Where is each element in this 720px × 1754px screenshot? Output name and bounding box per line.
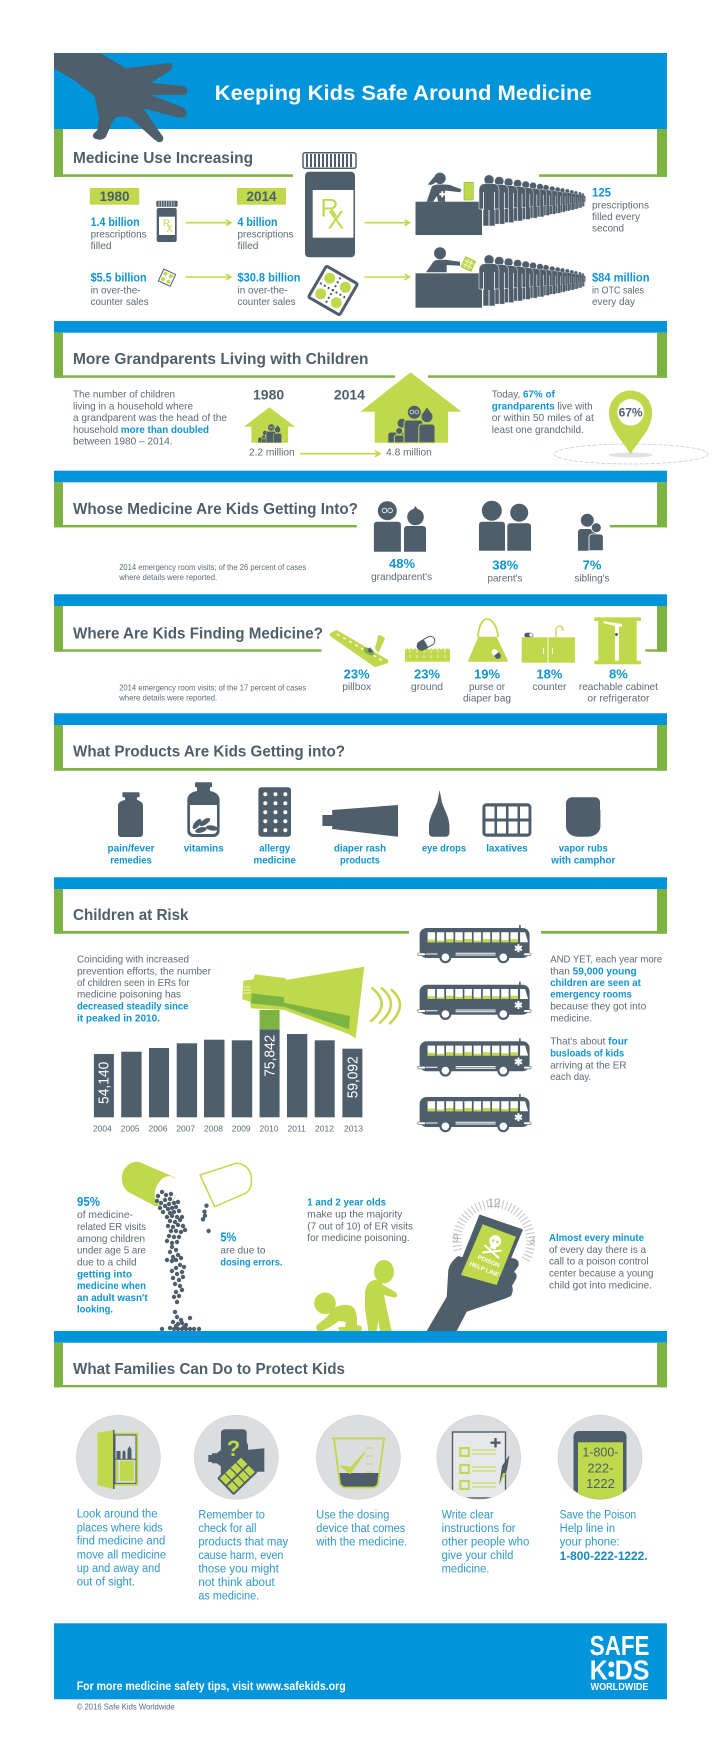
tip 1: medicine cabinet: move all medicine — [77, 1549, 166, 1561]
text: 95 percent getting into medicine: among children — [77, 1233, 145, 1245]
tip 2: check all products: as medicine. — [198, 1590, 259, 1602]
text: almost every minute: of every day there is a — [549, 1244, 646, 1256]
stat: ground 23 percent: ground — [411, 681, 443, 693]
text: and yet 59,000 children: medicine. — [550, 1012, 592, 1024]
bar chart: ER visits 2004 to 2013 — [93, 1010, 363, 1133]
stat: 125 prescriptions per second: prescriptions — [592, 199, 649, 211]
stat: sibling's 7 percent: sibling's — [574, 572, 610, 584]
stat: 84 million OTC sales: every day — [592, 296, 636, 308]
icon: megaphone — [242, 967, 400, 1038]
2014 prescriptions stat: filled — [238, 240, 259, 252]
tip 5: save poison help line: 222- — [587, 1460, 613, 1475]
text: 95 percent getting into medicine: medicine when — [77, 1280, 146, 1292]
stat: pillbox 23 percent — [330, 630, 388, 693]
arrow — [364, 220, 410, 226]
tip 4: clear instructions: Write clear — [442, 1509, 494, 1521]
text: grandparent household paragraph: a grandparent was the head of the — [73, 412, 227, 424]
icon: map pin 67 percent: 67% — [619, 406, 643, 420]
text: 95 percent getting into medicine: getting into — [77, 1268, 132, 1280]
text: 95 percent getting into medicine: 95% — [77, 1194, 100, 1209]
text: and yet 59,000 children: than 59,000 young — [550, 965, 637, 977]
stat: counter 18 percent: counter — [532, 681, 567, 693]
bar chart: ER visits 2004 to 2013: 54,140 — [97, 1062, 113, 1104]
text: 67 percent of grandparents: or within 50 miles of at — [492, 412, 594, 424]
text: grandparent household paragraph — [73, 388, 227, 448]
product: allergy medicine: medicine — [254, 854, 296, 866]
text: and yet 59,000 children: emergency rooms — [550, 989, 632, 1001]
tip 4: clear instructions: instructions for — [442, 1523, 516, 1535]
logo: safe kids worldwide — [590, 1630, 649, 1693]
text: ER visits trend — [77, 953, 211, 1024]
stat: 125 prescriptions per second: filled every — [592, 211, 641, 223]
panel frame: whose medicine — [54, 471, 667, 527]
product: pain fever remedies: pain/fever — [108, 843, 154, 855]
tip 4: clear instructions — [437, 1415, 529, 1575]
tip 5: save poison help line — [558, 1415, 648, 1563]
bar chart: ER visits 2004 to 2013: 2011 — [288, 1123, 306, 1133]
text: almost every minute: call to a poison control — [549, 1256, 649, 1268]
text: four busloads of kids: each day. — [550, 1071, 591, 1083]
2014 over-the-counter stat: in over-the- — [238, 284, 288, 296]
text: 67 percent of grandparents: grandparents live with — [492, 400, 593, 412]
text: 67 percent of grandparents — [492, 388, 594, 436]
icon: small prescription bottle: X — [166, 224, 173, 235]
stat: 84 million OTC sales — [592, 271, 650, 308]
panel frame: what products — [54, 713, 667, 771]
stat: parent's 38 percent: 38% — [492, 557, 519, 572]
heading: whose medicine: Whose Medicine Are Kids Getting Into? — [73, 501, 358, 518]
product: allergy medicine — [254, 787, 296, 866]
icon: hand holding poison help line phone: 3 — [529, 1235, 535, 1247]
icon: reaching hand — [54, 53, 187, 142]
stat: 125 prescriptions per second — [592, 186, 649, 235]
tip 5: save poison help line: Help line in — [560, 1523, 615, 1535]
product: pain fever remedies — [108, 792, 154, 866]
stat: counter 18 percent: 18% — [536, 666, 563, 681]
1980 over-the-counter stat — [91, 271, 149, 308]
product: eye drops — [422, 790, 466, 855]
tip 3: dosing device — [315, 1415, 407, 1548]
tip 5: save poison help line: 1-800-222-1222. — [560, 1549, 648, 1563]
stat: 84 million OTC sales: $84 million — [592, 271, 650, 285]
bar chart: ER visits 2004 to 2013: 2008 — [204, 1123, 223, 1133]
text: 95 percent getting into medicine: of medicine- — [77, 1209, 133, 1221]
text: grandparent household paragraph: The number of children — [73, 388, 175, 400]
1980 prescriptions stat — [90, 188, 147, 252]
text: 95 percent getting into medicine: under age 5 are — [77, 1245, 146, 1257]
tip 5: save poison help line: 1-800- — [582, 1445, 618, 1460]
2014 house with family: 4.8 million — [386, 447, 432, 459]
1980 house with family: 2.2 million — [249, 447, 295, 459]
stat: counter 18 percent — [522, 626, 575, 693]
text: almost every minute: center because a young — [549, 1268, 654, 1280]
text: and yet 59,000 children: because they got into — [550, 1001, 646, 1013]
heading: children at risk: Children at Risk — [73, 907, 189, 924]
product: laxatives: laxatives — [486, 843, 528, 855]
panel frame: children at risk — [54, 877, 667, 934]
text: 95 percent getting into medicine: due to a child — [77, 1256, 137, 1268]
text: four busloads of kids: busloads of kids — [550, 1048, 624, 1060]
arrow — [300, 451, 380, 457]
text: 5 percent dosing errors: dosing errors. — [220, 1256, 282, 1268]
stat: parent's 38 percent — [479, 501, 531, 584]
arrow — [364, 274, 410, 280]
stat: purse 19 percent: 19% — [474, 666, 500, 681]
stat: purse 19 percent: diaper bag — [463, 693, 511, 705]
text: 95 percent getting into medicine: looking. — [77, 1304, 113, 1316]
text: 1 and 2 year olds — [307, 1197, 413, 1244]
2014 over-the-counter stat — [238, 271, 300, 308]
stat: 125 prescriptions per second: second — [592, 223, 624, 235]
tip 1: medicine cabinet: up and away and — [77, 1563, 160, 1575]
text: and yet 59,000 children: children are seen at — [550, 977, 641, 989]
text: 5 percent dosing errors: 5% — [220, 1230, 237, 1245]
text: almost every minute — [549, 1232, 654, 1291]
note: where source: where details were reported. — [118, 693, 217, 703]
1980 over-the-counter stat: in over-the- — [91, 284, 141, 296]
tip 4: clear instructions: other people who — [442, 1536, 529, 1548]
tip 1: medicine cabinet: Look around the — [77, 1509, 158, 1521]
bar chart: ER visits 2004 to 2013: 2010 — [260, 1123, 279, 1133]
text: 95 percent getting into medicine — [77, 1194, 148, 1316]
icon: ambulance 4 — [418, 1094, 531, 1132]
tip 2: check all products: check for all — [198, 1523, 256, 1535]
tip 2: check all products: Remember to — [198, 1509, 265, 1521]
arrow — [186, 274, 231, 280]
stat: parent's 38 percent: parent's — [488, 572, 522, 584]
tip 2: check all products: those you might — [198, 1563, 280, 1575]
product: diaper rash products: products — [340, 854, 380, 866]
stat: cabinet 8 percent — [579, 617, 658, 705]
stat: sibling's 7 percent: 7% — [583, 557, 602, 572]
tip 4: clear instructions: medicine. — [442, 1563, 489, 1575]
tip 5: save poison help line: your phone: — [560, 1536, 620, 1548]
product: eye drops: eye drops — [422, 843, 466, 855]
1980 over-the-counter stat: counter sales — [91, 296, 149, 308]
panel: footer banner — [54, 1623, 667, 1699]
text: grandparent household paragraph: household more than doubled — [73, 424, 209, 436]
stat: grandparent's 48 percent: 48% — [389, 556, 415, 571]
icon: large prescription bottle — [303, 153, 356, 257]
product: vapor rubs with camphor: with camphor — [550, 854, 615, 866]
tip 2: check all products: ? — [227, 1436, 240, 1461]
text: almost every minute: Almost every minute — [549, 1232, 644, 1244]
icon: map pin 67 percent — [554, 390, 708, 464]
logo: safe kids worldwide: KIDS — [590, 1654, 649, 1685]
icon: spilling capsule and pills — [122, 1162, 252, 1329]
icon: small pill pack — [158, 269, 176, 286]
product: vapor rubs with camphor — [550, 797, 615, 866]
icon: crawling baby and toddler — [314, 1260, 397, 1331]
2014 prescriptions stat: 2014 — [246, 189, 277, 204]
product: vitamins: vitamins — [184, 843, 224, 855]
note: where source: 2014 emergency room visits; of the 17 percent of cases — [119, 683, 306, 693]
tip 1: medicine cabinet: out of sight. — [77, 1576, 135, 1588]
text: 1 and 2 year olds: (7 out of 10) of ER visits — [307, 1220, 413, 1232]
product: allergy medicine: allergy — [259, 843, 290, 855]
icon: hand holding poison help line phone — [427, 1196, 535, 1331]
panel frame: grandparents — [54, 321, 667, 378]
text: and yet 59,000 children — [550, 953, 662, 1024]
text: 67 percent of grandparents: Today, 67% of — [492, 388, 555, 400]
tip 3: dosing device: device that comes — [316, 1523, 406, 1535]
text: 5 percent dosing errors: are due to — [220, 1244, 266, 1256]
stat: 125 prescriptions per second: 125 — [592, 186, 611, 200]
2014 prescriptions stat — [237, 188, 294, 252]
stat: ground 23 percent: 23% — [414, 666, 440, 681]
product: vapor rubs with camphor: vapor rubs — [559, 843, 608, 855]
heading: where finding: Where Are Kids Finding Medicine? — [73, 625, 323, 642]
stat: purse 19 percent — [463, 619, 511, 705]
1980 house with family: 1980 — [253, 386, 284, 402]
tip 1: medicine cabinet — [76, 1415, 166, 1588]
icon: large prescription bottle: R — [320, 195, 339, 223]
panel frame: what families can do — [54, 1331, 667, 1387]
icon: large pill pack — [308, 266, 358, 315]
bar chart: ER visits 2004 to 2013: 2006 — [149, 1123, 168, 1133]
bar chart: ER visits 2004 to 2013: 2004 — [93, 1123, 112, 1133]
product: vitamins — [184, 782, 224, 855]
copyright: © 2016 Safe Kids Worldwide — [77, 1701, 175, 1711]
product: pain fever remedies: remedies — [110, 854, 152, 866]
note: whose medicine source: where details were reported. — [118, 572, 217, 582]
text: ER visits trend: medicine poisoning has — [77, 989, 181, 1001]
1980 prescriptions stat: 1.4 billion — [91, 215, 140, 229]
text: ER visits trend: of children seen in ERs for — [77, 977, 190, 989]
icon: ambulance 2 — [418, 982, 531, 1020]
heading: what families can do: What Families Can Do to Protect Kids — [73, 1361, 345, 1378]
text: 5 percent dosing errors — [220, 1230, 282, 1268]
icon: hand holding poison help line phone: POISON — [476, 1255, 500, 1269]
stat: cabinet 8 percent: or refrigerator — [587, 693, 650, 705]
icon: hand holding poison help line phone: HELP LINE — [468, 1261, 499, 1279]
title: Keeping Kids Safe Around Medicine — [215, 81, 592, 105]
stat: grandparent's 48 percent: grandparent's — [371, 571, 432, 583]
logo: safe kids worldwide: WORLDWIDE — [590, 1682, 649, 1693]
tip 2: check all products: cause harm, even — [198, 1550, 283, 1562]
text: and yet 59,000 children: AND YET, each year more — [550, 953, 662, 965]
text: 95 percent getting into medicine: related ER visits — [77, 1221, 146, 1233]
stat: pillbox 23 percent: pillbox — [342, 681, 372, 693]
stat: cabinet 8 percent: 8% — [609, 666, 628, 681]
footer call to action: For more medicine safety tips, visit www.safekids.org — [77, 1679, 346, 1693]
stat: cabinet 8 percent: reachable cabinet — [579, 681, 658, 693]
icon: small prescription bottle — [156, 201, 178, 242]
1980 prescriptions stat: prescriptions — [91, 228, 147, 240]
stat: grandparent's 48 percent — [371, 501, 432, 583]
text: grandparent household paragraph: between 1980 – 2014. — [73, 436, 173, 448]
heading: medicine use increasing: Medicine Use Increasing — [73, 150, 253, 167]
heading: what products: What Products Are Kids Getting into? — [73, 744, 345, 761]
1980 over-the-counter stat: $5.5 billion — [91, 271, 147, 285]
tip 3: dosing device: with the medicine. — [315, 1536, 407, 1548]
icon: cashier selling pills to queue — [416, 247, 586, 308]
2014 prescriptions stat: 4 billion — [238, 215, 278, 229]
tip 1: medicine cabinet: places where kids — [77, 1522, 163, 1534]
bar chart: ER visits 2004 to 2013: 2007 — [176, 1123, 195, 1133]
icon: ambulance 1 — [418, 925, 531, 963]
icon: small prescription bottle: R — [163, 219, 170, 230]
stat: 84 million OTC sales: in OTC sales — [592, 284, 644, 296]
2014 prescriptions stat: prescriptions — [238, 228, 294, 240]
text: 67 percent of grandparents: least one grandchild. — [492, 424, 584, 436]
text: 95 percent getting into medicine: an adult wasn't — [77, 1292, 148, 1304]
icon: large prescription bottle: X — [328, 206, 344, 234]
icon: pharmacist handing bottle to queue — [416, 173, 586, 235]
note: whose medicine source — [118, 562, 306, 582]
1980 prescriptions stat: 1980 — [99, 189, 130, 204]
1980 prescriptions stat: filled — [91, 240, 112, 252]
note: where source — [118, 683, 306, 703]
tip 4: clear instructions: give your child — [442, 1550, 513, 1562]
text: ER visits trend: prevention efforts, the number — [77, 965, 211, 977]
panel: title banner — [54, 53, 667, 129]
bar chart: ER visits 2004 to 2013: 59,092 — [346, 1056, 362, 1098]
tip 2: check all products — [194, 1415, 288, 1602]
text: 1 and 2 year olds: 1 and 2 year olds — [307, 1197, 386, 1209]
tip 3: dosing device: Use the dosing — [316, 1509, 389, 1521]
product: diaper rash products — [322, 805, 398, 866]
heading: more grandparents: More Grandparents Living with Children — [73, 351, 368, 368]
2014 over-the-counter stat: counter sales — [238, 296, 296, 308]
bar chart: ER visits 2004 to 2013: 2005 — [121, 1123, 140, 1133]
text: ER visits trend: it peaked in 2010. — [77, 1012, 160, 1024]
stat: purse 19 percent: purse or — [469, 681, 505, 693]
panel frame: where finding — [54, 594, 667, 652]
bar chart: ER visits 2004 to 2013: 2009 — [232, 1123, 251, 1133]
icon: hand holding poison help line phone: 9 — [452, 1233, 459, 1245]
text: 1 and 2 year olds: make up the majority — [307, 1209, 403, 1221]
text: almost every minute: child got into medicine. — [549, 1279, 652, 1291]
tip 2: check all products: not think about — [198, 1577, 276, 1589]
text: four busloads of kids: That's about four — [550, 1036, 628, 1048]
icon: hand holding poison help line phone: 12 — [487, 1196, 501, 1210]
1980 house with family — [244, 386, 295, 459]
stat: sibling's 7 percent — [574, 514, 610, 584]
text: ER visits trend: Coinciding with increased — [77, 953, 189, 965]
2014 house with family — [334, 372, 462, 459]
bar chart: ER visits 2004 to 2013: 2012 — [315, 1123, 334, 1133]
stat: ground 23 percent — [405, 634, 450, 693]
text: 1 and 2 year olds: for medicine poisoning. — [307, 1232, 410, 1244]
text: ER visits trend: decreased steadily since — [77, 1001, 189, 1013]
panel frame: medicine use increasing — [54, 129, 667, 177]
tip 2: check all products: products that may — [198, 1536, 288, 1548]
stat: pillbox 23 percent: 23% — [344, 666, 370, 681]
text: four busloads of kids: arriving at the ER — [550, 1059, 627, 1071]
tip 5: save poison help line: Save the Poison — [560, 1509, 636, 1521]
text: grandparent household paragraph: living in a household where — [73, 400, 193, 412]
arrow — [186, 220, 231, 226]
2014 over-the-counter stat: $30.8 billion — [238, 271, 300, 285]
tip 5: save poison help line: 1222 — [586, 1476, 615, 1491]
icon: ambulance 3 — [418, 1038, 531, 1077]
product: laxatives — [482, 803, 531, 855]
product: diaper rash products: diaper rash — [334, 843, 386, 855]
note: whose medicine source: 2014 emergency room visits; of the 26 percent of cases — [119, 562, 306, 572]
bar chart: ER visits 2004 to 2013: 2013 — [344, 1123, 363, 1133]
2014 house with family: 2014 — [334, 386, 365, 402]
logo: safe kids worldwide: SAFE — [590, 1630, 649, 1661]
text: four busloads of kids — [550, 1036, 628, 1083]
bar chart: ER visits 2004 to 2013: 75,842 — [262, 1035, 278, 1077]
tip 1: medicine cabinet: find medicine and — [77, 1536, 165, 1548]
